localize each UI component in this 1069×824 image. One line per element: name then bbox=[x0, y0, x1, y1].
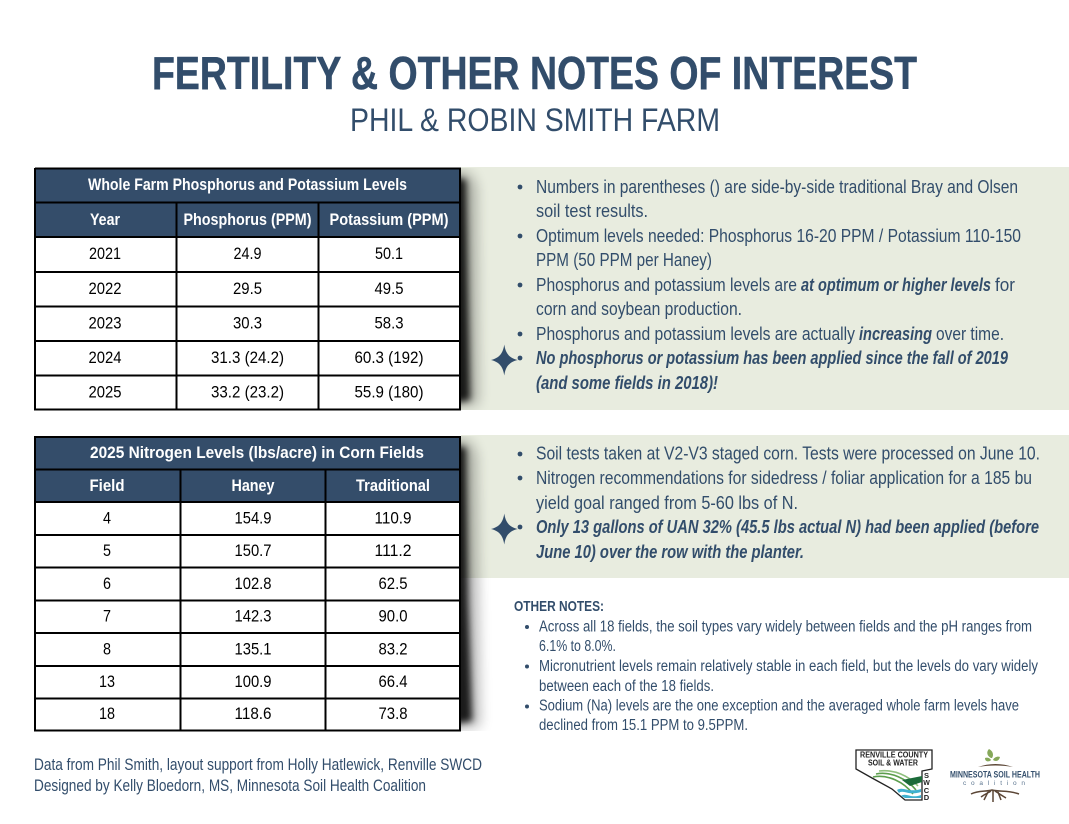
table rows: 100.9 bbox=[234, 672, 272, 691]
other notes list bbox=[525, 618, 1038, 734]
bullet list: soil test notes: for bbox=[995, 275, 1015, 295]
table rows bbox=[88, 244, 424, 402]
table rows: 18 bbox=[99, 704, 115, 723]
logo: Renville County SWCD: C bbox=[924, 786, 930, 795]
table rows bbox=[99, 508, 412, 723]
table rows: 30.3 bbox=[233, 314, 262, 332]
icon: sparkle bbox=[491, 344, 518, 376]
table rows: 2024 bbox=[88, 348, 122, 367]
bullet list: soil test notes: soil test results. bbox=[536, 201, 648, 221]
logo: Renville County SWCD: W bbox=[923, 780, 930, 787]
table rows: 62.5 bbox=[378, 574, 408, 593]
table rows: 135.1 bbox=[234, 640, 272, 658]
bullet list: soil test notes: Phosphorus and potassium levels are bbox=[536, 275, 797, 295]
table: nitrogen levels bbox=[34, 436, 461, 731]
logo: Renville County SWCD: S bbox=[924, 771, 929, 780]
footer credits: Data from Phil Smith, layout support from Holly Hatlewick, Renville SWCD bbox=[34, 756, 482, 774]
table rows: 150.7 bbox=[234, 541, 272, 560]
column headers: Phosphorus (PPM) bbox=[184, 211, 312, 229]
table rows: 5 bbox=[103, 541, 111, 560]
table rows: 7 bbox=[103, 606, 111, 626]
table rows: 2021 bbox=[89, 244, 121, 263]
text block: other notes bbox=[514, 598, 1038, 734]
table rows: 2023 bbox=[88, 314, 122, 332]
table rows: 4 bbox=[103, 508, 111, 528]
column headers bbox=[90, 211, 448, 229]
other notes heading: OTHER NOTES: bbox=[514, 598, 604, 615]
table rows: 49.5 bbox=[374, 279, 404, 298]
logo: Renville County SWCD: RENVILLE COUNTY bbox=[860, 751, 929, 760]
logo: Minnesota Soil Health Coalition bbox=[950, 749, 1040, 802]
table rows: 110.9 bbox=[374, 508, 412, 528]
bullet list: soil test notes: increasing bbox=[859, 324, 932, 344]
shadow: first table bbox=[461, 168, 485, 410]
column headers: Potassium (PPM) bbox=[330, 211, 448, 229]
table rows: 154.9 bbox=[234, 508, 272, 528]
panel: phosphorus and potassium notes bbox=[450, 167, 1069, 410]
table rows: 31.3 (24.2) bbox=[211, 348, 284, 367]
table rows: 29.5 bbox=[233, 279, 262, 298]
column headers: Field bbox=[90, 477, 124, 495]
table rows: 55.9 (180) bbox=[354, 382, 424, 402]
bullet list: nitrogen tests: June 10) over the row with the planter. bbox=[536, 542, 804, 562]
table title: 2025 Nitrogen Levels (lbs/acre) in Corn Fields bbox=[90, 444, 424, 462]
table rows: 66.4 bbox=[378, 672, 408, 691]
bullet list: soil test notes: (and some fields in 2018)! bbox=[536, 373, 718, 393]
logo: Renville County SWCD bbox=[856, 750, 932, 802]
table title: Whole Farm Phosphorus and Potassium Levels bbox=[88, 176, 407, 194]
other notes list: 6.1% to 8.0%. bbox=[539, 638, 616, 655]
table: phosphorus and potassium levels bbox=[34, 168, 461, 410]
bullet list: soil test notes: corn and soybean production. bbox=[536, 299, 742, 319]
other notes list: between each of the 18 fields. bbox=[539, 678, 714, 695]
column headers: Haney bbox=[232, 477, 275, 495]
table rows: 60.3 (192) bbox=[354, 348, 424, 367]
panel: nitrogen notes bbox=[461, 435, 1069, 578]
table rows: 24.9 bbox=[234, 244, 262, 263]
column headers bbox=[90, 477, 430, 495]
table rows: 8 bbox=[103, 640, 111, 658]
footer credits: Designed by Kelly Bloedorn, MS, Minnesota Soil Health Coalition bbox=[34, 777, 426, 795]
table rows: 90.0 bbox=[378, 606, 408, 626]
logo: Renville County SWCD: SOIL & WATER bbox=[868, 759, 918, 768]
table rows: 102.8 bbox=[234, 574, 272, 593]
bullet list: soil test notes: at optimum or higher levels bbox=[801, 275, 991, 295]
table rows: 111.2 bbox=[374, 541, 412, 560]
bullet list: soil test notes: Phosphorus and potassium levels are actually bbox=[536, 324, 855, 344]
column headers: Traditional bbox=[356, 477, 430, 495]
logo: Minnesota Soil Health Coalition: coalition bbox=[963, 780, 1025, 787]
bullet list: soil test notes: over time. bbox=[936, 324, 1004, 344]
table rows: 2022 bbox=[88, 279, 122, 298]
subtitle: PHIL & ROBIN SMITH FARM bbox=[350, 102, 720, 138]
table rows: 13 bbox=[99, 672, 115, 691]
bullet list: soil test notes bbox=[518, 177, 1021, 393]
table rows: 73.8 bbox=[378, 704, 408, 723]
bullet list: nitrogen tests bbox=[518, 444, 1040, 562]
logo: Renville County SWCD: D bbox=[924, 793, 930, 802]
bullet list: soil test notes: PPM (50 PPM per Haney) bbox=[536, 250, 712, 270]
table rows: 118.6 bbox=[234, 704, 272, 723]
bullet list: nitrogen tests: yield goal ranged from 5-60 lbs of N. bbox=[536, 493, 798, 513]
logo: Minnesota Soil Health Coalition: MINNESOTA SOIL HEALTH bbox=[950, 770, 1040, 780]
table rows: 142.3 bbox=[234, 606, 272, 626]
table rows: 6 bbox=[103, 574, 111, 593]
table rows: 33.2 (23.2) bbox=[211, 382, 284, 402]
shadow: second table bbox=[461, 436, 487, 731]
table rows: 58.3 bbox=[374, 314, 404, 332]
other notes list: declined from 15.1 PPM to 9.5PPM. bbox=[539, 717, 748, 734]
table rows: 50.1 bbox=[375, 244, 403, 263]
footer credits bbox=[34, 756, 482, 795]
table rows: 2025 bbox=[88, 382, 122, 402]
table rows: 83.2 bbox=[378, 640, 408, 658]
icon: sparkle bbox=[491, 514, 518, 544]
column headers: Year bbox=[90, 211, 120, 229]
title: FERTILITY & OTHER NOTES OF INTEREST bbox=[152, 47, 917, 99]
